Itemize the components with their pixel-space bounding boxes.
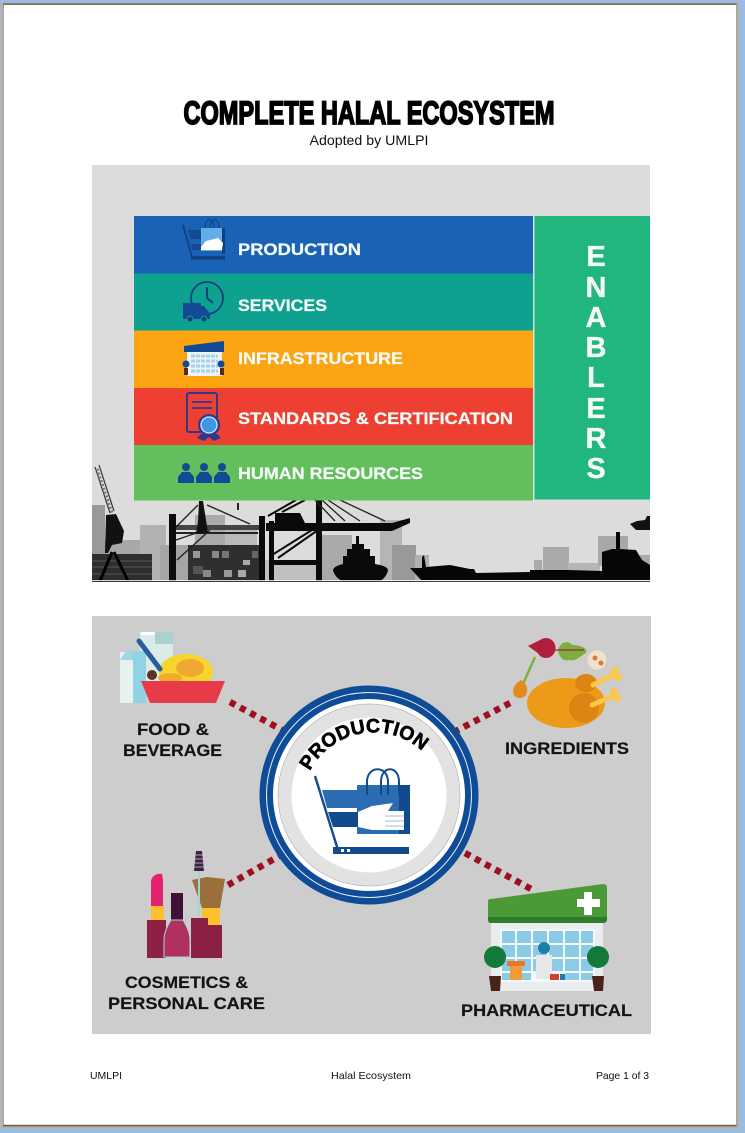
- footer: Halal Ecosystem: [331, 1070, 411, 1082]
- icon: online shopping hand: [315, 769, 410, 854]
- gantry cranes: [169, 500, 410, 581]
- label: cosmetics and personal care: COSMETICS &: [125, 973, 248, 992]
- containers: [188, 545, 264, 581]
- label: ingredients: INGREDIENTS: [505, 739, 629, 758]
- footer: Page 1 of 3: [596, 1070, 649, 1082]
- title: COMPLETE HALAL ECOSYSTEM: [184, 95, 554, 131]
- panel: halal ecosystem layers: [92, 165, 650, 582]
- icon: ingredients: [513, 638, 622, 728]
- subtitle: Adopted by UMLPI: [310, 132, 428, 148]
- label: cosmetics and personal care: PERSONAL CARE: [108, 994, 265, 1013]
- separator line: [92, 580, 650, 582]
- enablers column: R: [586, 423, 607, 455]
- central production badge: [260, 686, 478, 904]
- icon: clock and van: [183, 282, 223, 322]
- icon: people: [178, 463, 230, 483]
- icon: food and beverage: [120, 632, 225, 703]
- band: services: [134, 274, 533, 330]
- skyline: [92, 465, 650, 581]
- footer: [90, 1070, 649, 1082]
- label: food and beverage: BEVERAGE: [123, 741, 222, 760]
- badge label: PRODUCTION: [298, 718, 430, 770]
- enablers column: E: [586, 241, 606, 273]
- enablers column: A: [586, 302, 607, 334]
- label: food and beverage: FOOD &: [137, 720, 209, 739]
- enablers column: B: [586, 332, 606, 364]
- panel: production categories: [92, 616, 651, 1034]
- label: standards and certification: STANDARDS & CERTIFICATION: [238, 409, 513, 428]
- label: cosmetics and personal care: [108, 973, 265, 1013]
- icon: building: [182, 341, 224, 376]
- dotted connectors: [228, 702, 531, 889]
- label: infrastructure: INFRASTRUCTURE: [238, 349, 403, 368]
- tanker: [410, 532, 650, 580]
- band: standards and certification: [134, 388, 533, 445]
- cargo ship: [333, 536, 388, 581]
- label: production: PRODUCTION: [238, 240, 361, 259]
- footer: UMLPI: [90, 1070, 122, 1082]
- band: production: [134, 216, 533, 274]
- icon: pharmacy: [484, 884, 609, 991]
- enablers column: E: [586, 393, 606, 425]
- band: human resources: [134, 445, 533, 500]
- enablers column: [533, 216, 650, 500]
- dark block: [92, 554, 152, 581]
- enablers column: L: [587, 362, 605, 394]
- label: services: SERVICES: [238, 296, 327, 315]
- enablers column: S: [586, 453, 606, 485]
- icon: certificate: [187, 393, 221, 441]
- patrol boat: [630, 516, 650, 530]
- icon: cosmetics: [147, 851, 225, 958]
- label: food and beverage: [123, 720, 222, 760]
- harbour crane: [95, 465, 128, 581]
- label: pharmaceutical: PHARMACEUTICAL: [461, 1001, 632, 1020]
- label: human resources: HUMAN RESOURCES: [238, 464, 423, 483]
- enablers column: N: [586, 272, 606, 304]
- band: infrastructure: [134, 330, 533, 388]
- icon: production: [183, 220, 225, 260]
